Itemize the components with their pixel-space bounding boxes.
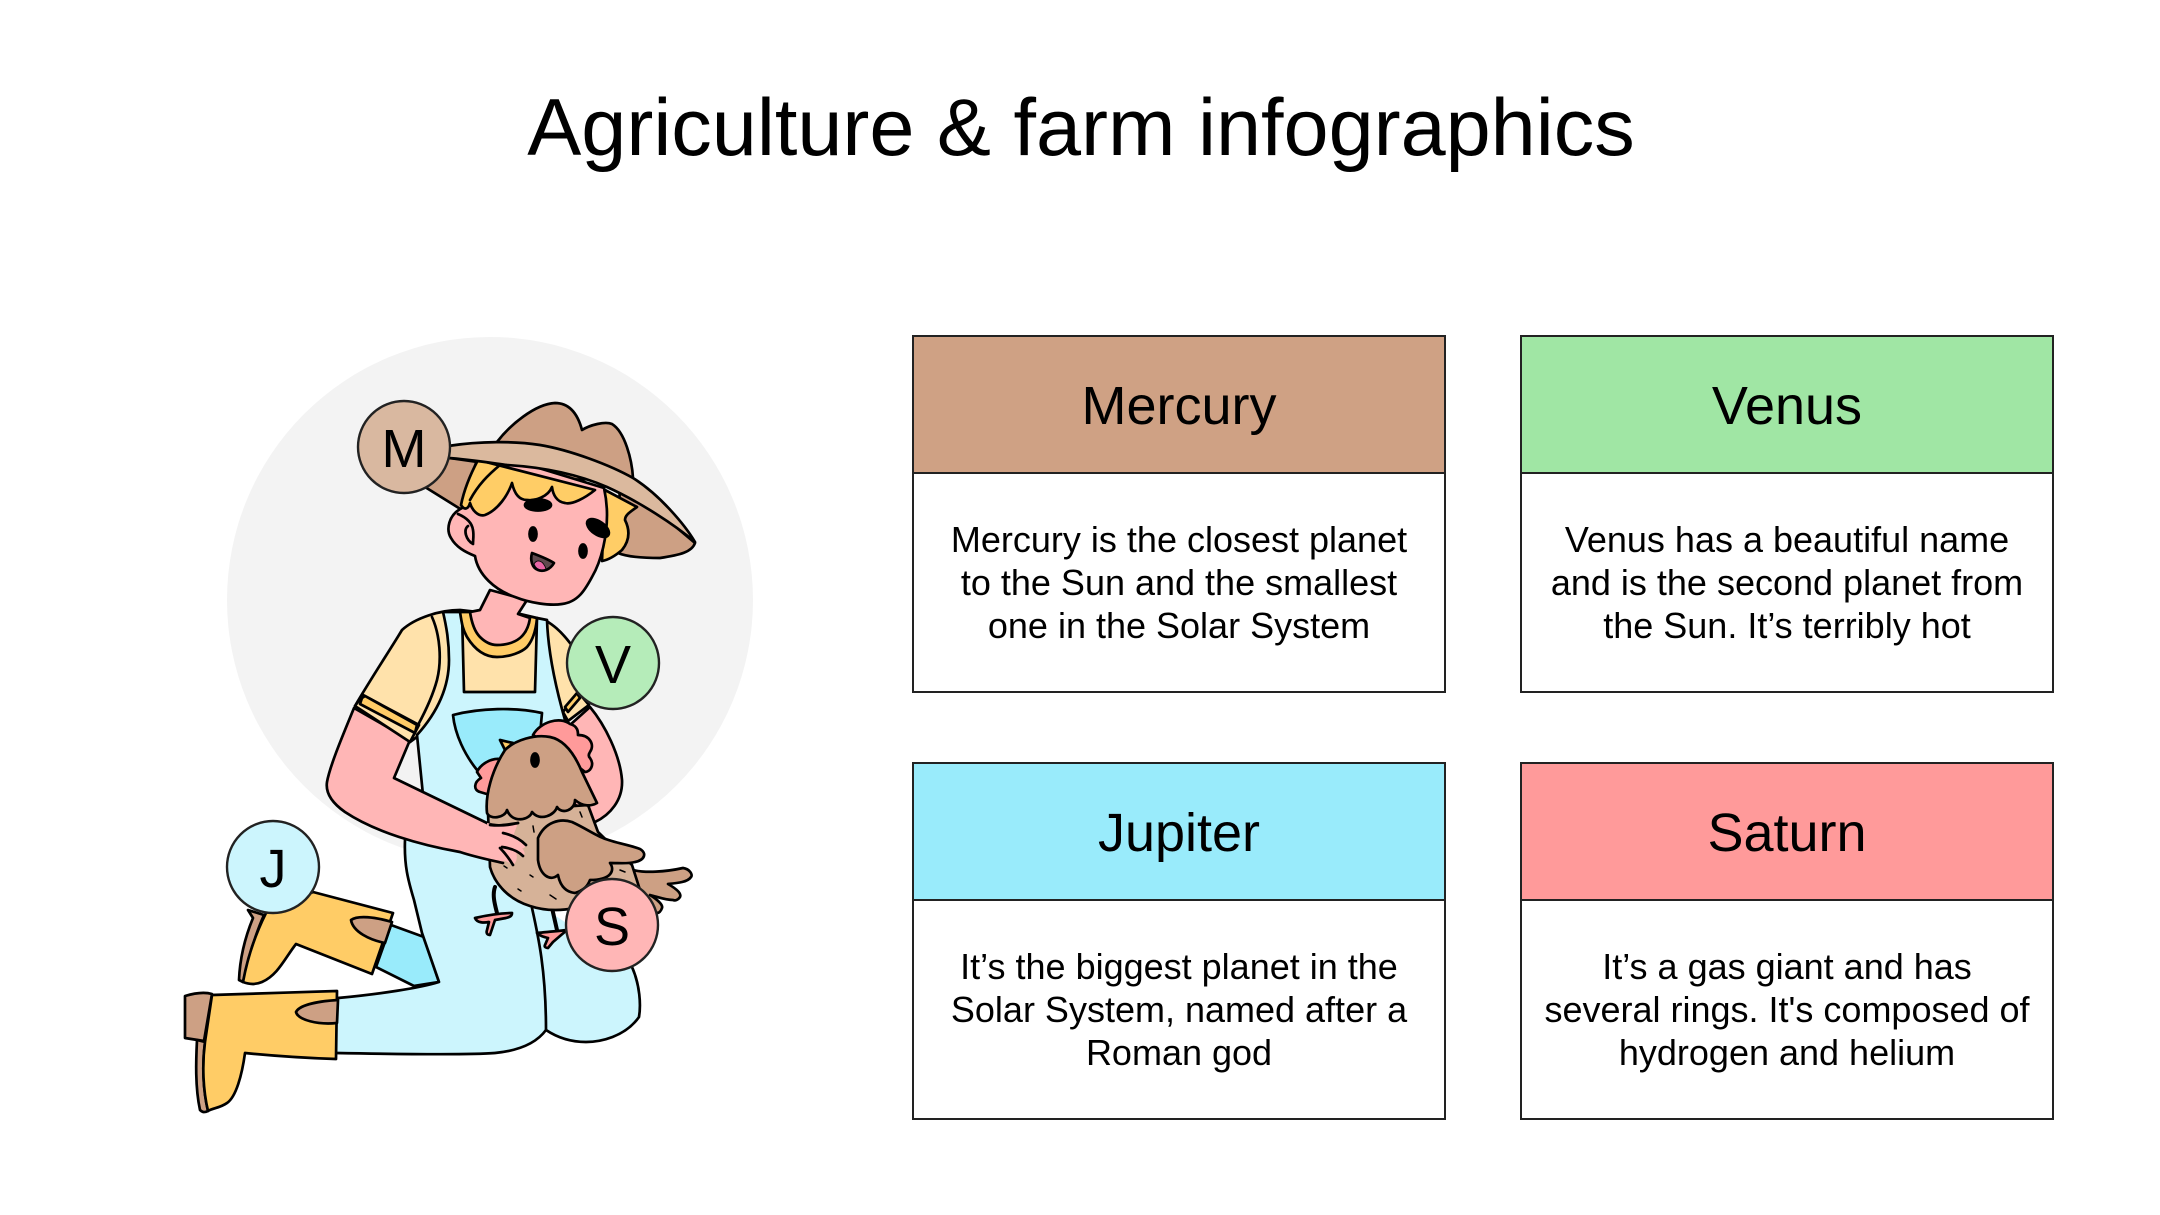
text: Mercury [951, 519, 1407, 646]
hen tail [627, 868, 692, 913]
hat crown [497, 403, 633, 480]
hen wing [538, 821, 644, 893]
text: Jupiter [951, 946, 1408, 1073]
text: Saturn: It’s a gas giant and has [1602, 946, 1972, 987]
hen body [488, 805, 640, 910]
hair back [602, 490, 637, 561]
farmer figure [185, 403, 695, 1112]
heading: Venus [1522, 337, 2052, 474]
label V: V [595, 635, 631, 695]
right cuff [563, 692, 589, 721]
text: Jupiter: Roman god [1086, 1032, 1272, 1073]
text: Saturn: hydrogen and helium [1619, 1032, 1955, 1073]
hen wattle [475, 759, 500, 795]
hand fingers [487, 823, 526, 865]
panel: Jupiter [912, 762, 1446, 1120]
neck [470, 590, 530, 645]
title: Agriculture & farm infographics [527, 83, 1635, 173]
shirt [355, 610, 588, 742]
front boot [185, 991, 338, 1112]
text: Jupiter: Solar System, named after a [951, 989, 1407, 1030]
left cuff [355, 695, 419, 742]
hen eye [532, 754, 538, 766]
text: Mercury: Mercury is the closest planet [951, 519, 1407, 560]
label V [567, 617, 659, 709]
overalls body [336, 720, 640, 1054]
text: Venus: the Sun. It’s terribly hot [1603, 605, 1971, 646]
text: Mercury: one in the Solar System [988, 605, 1370, 646]
label S [566, 879, 658, 971]
right arm [570, 707, 622, 822]
text: Venus: Venus has a beautiful name [1565, 519, 2009, 560]
head [449, 450, 607, 605]
overalls bib and straps [417, 612, 565, 795]
collar [460, 612, 537, 657]
hat brim [448, 442, 695, 542]
label M [358, 401, 450, 493]
hen legs [475, 887, 567, 948]
sleeve inner line [418, 617, 440, 725]
text: Venus: and is the second planet from [1551, 562, 2023, 603]
hair inner line [470, 465, 500, 500]
face: brow and eyes [525, 500, 612, 558]
heading: Saturn: Saturn [1707, 803, 1867, 863]
hen beak [500, 740, 513, 750]
back boot [239, 892, 393, 984]
panel: Mercury [912, 335, 1446, 693]
hat back right [618, 480, 695, 558]
overalls centre seam [532, 908, 546, 1030]
hen comb [533, 720, 592, 772]
back leg sock [376, 925, 439, 986]
mouth [531, 553, 554, 571]
label J [227, 821, 319, 913]
text: Saturn [1544, 946, 2030, 1073]
hat back left [425, 456, 478, 510]
heading: Jupiter [914, 764, 1444, 901]
text: Jupiter: It’s the biggest planet in the [960, 946, 1398, 987]
left arm [327, 708, 518, 863]
text: Mercury: to the Sun and the smallest [961, 562, 1397, 603]
hen speckles [504, 812, 625, 899]
heading: Venus: Venus [1712, 376, 1862, 436]
hair front [461, 460, 595, 515]
heading: Mercury [914, 337, 1444, 474]
background circle [227, 337, 753, 863]
label J: J [260, 839, 286, 899]
panel: Saturn [1520, 762, 2054, 1120]
pocket [453, 709, 542, 780]
text: Venus [1551, 519, 2023, 646]
heading: Jupiter: Jupiter [1098, 803, 1260, 863]
panel: Venus [1520, 335, 2054, 693]
label S: S [594, 897, 630, 957]
heading: Mercury: Mercury [1081, 376, 1276, 436]
label M: M [382, 419, 426, 479]
ear [458, 514, 473, 544]
hen head and neck [487, 736, 597, 819]
text: Saturn: several rings. It's composed of [1544, 989, 2030, 1030]
heading: Saturn [1522, 764, 2052, 901]
